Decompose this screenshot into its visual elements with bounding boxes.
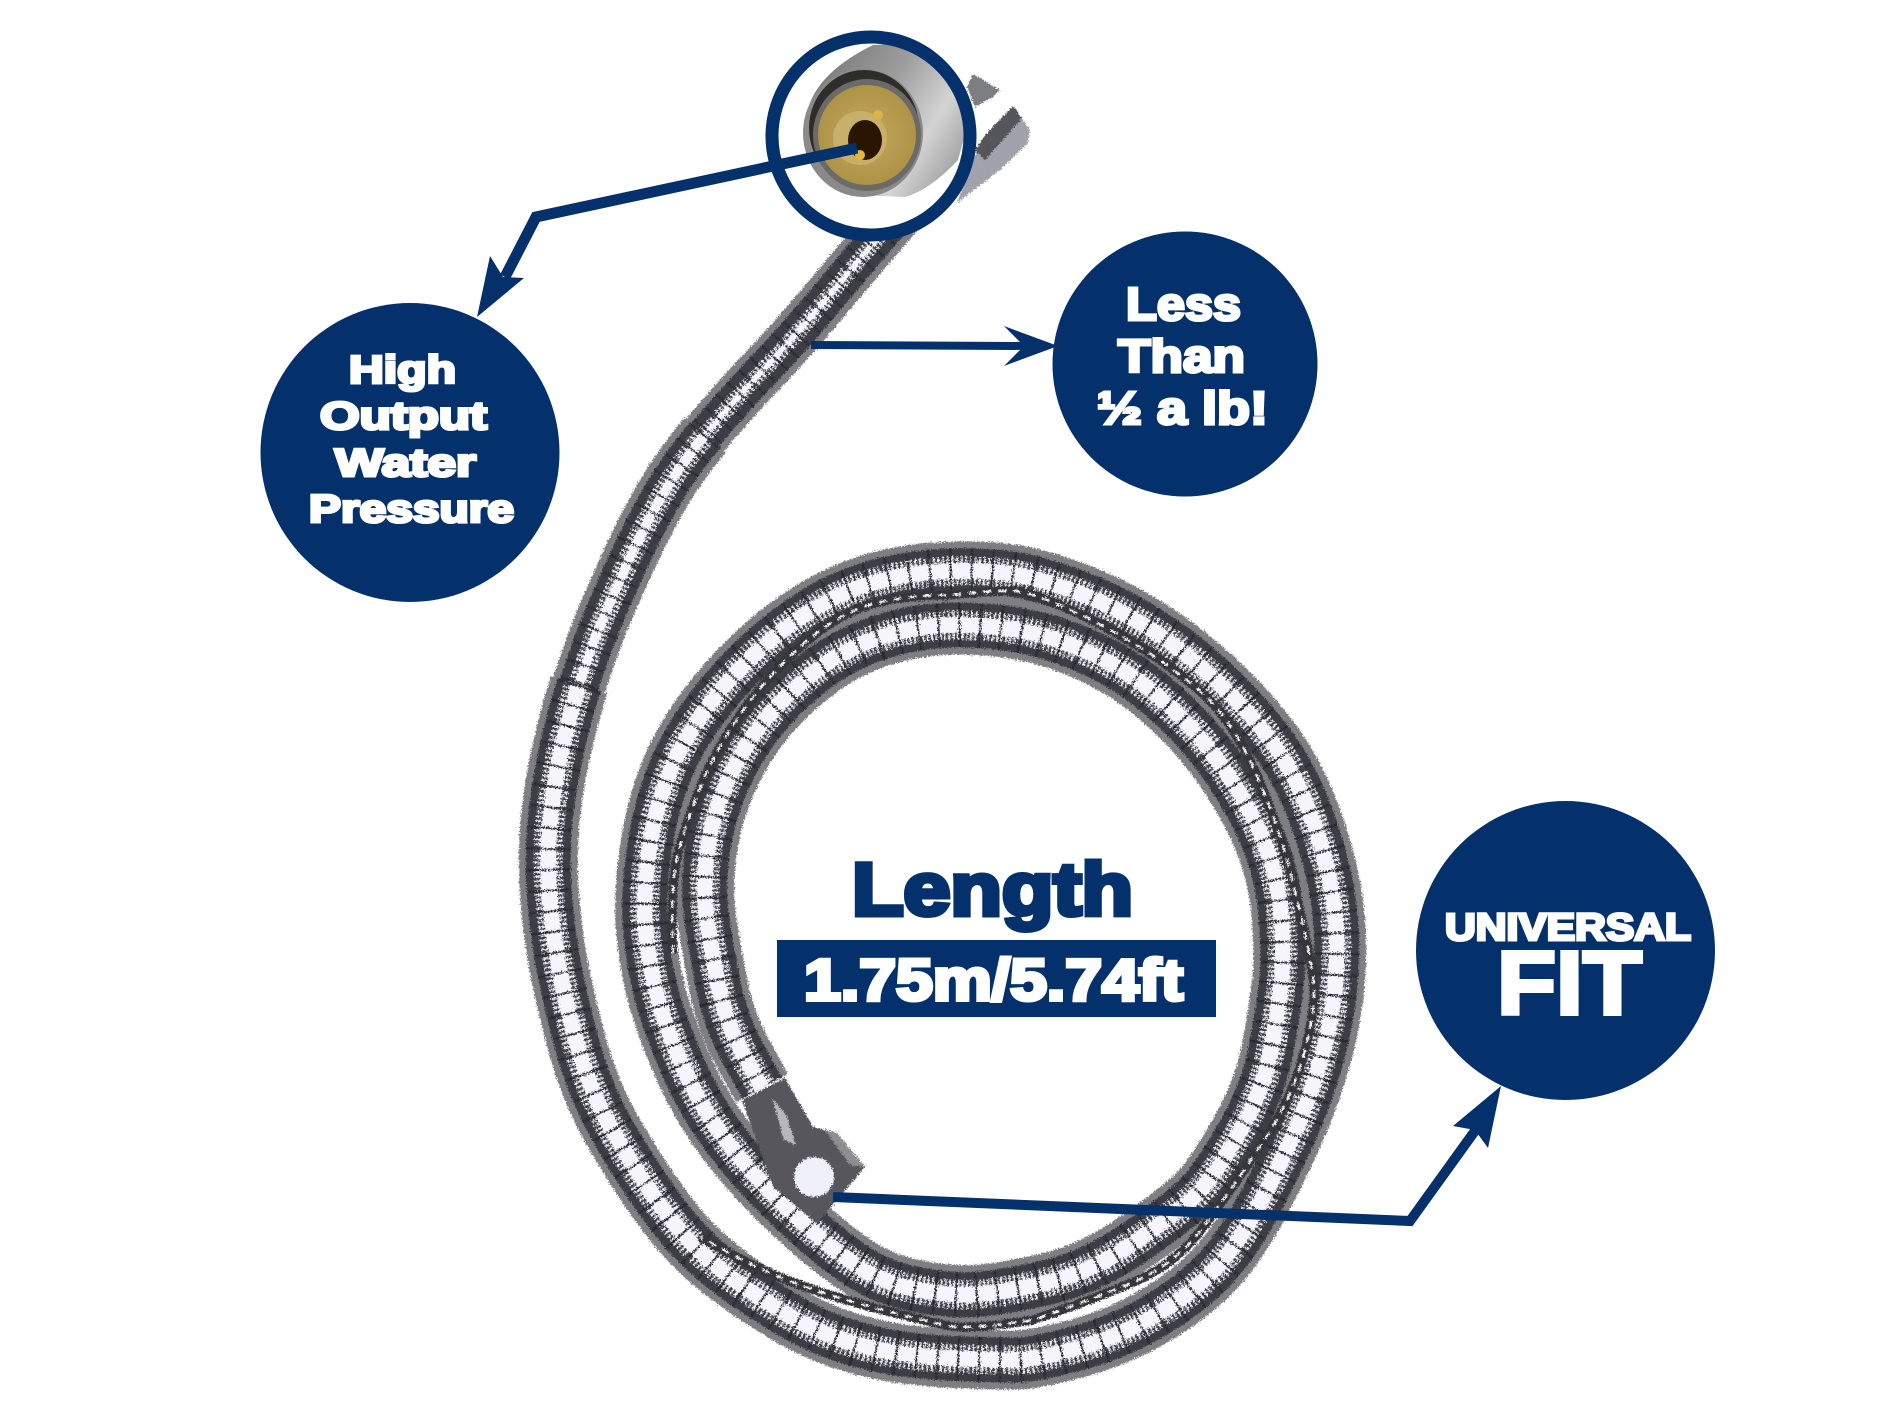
arrow: connector to universal fit callout xyxy=(833,1086,1501,1221)
callout: high output water pressure xyxy=(260,303,560,602)
infographic canvas xyxy=(260,30,1715,1391)
length heading: Length xyxy=(852,848,1133,931)
callout: less than half a pound: Less xyxy=(1126,278,1241,330)
callout: universal fit xyxy=(1416,801,1715,1100)
callout: high output water pressure: Water xyxy=(335,442,476,485)
callout: universal fit: FIT xyxy=(1497,934,1642,1034)
hose end connector xyxy=(742,1078,865,1223)
arrow: hose to weight callout xyxy=(811,326,1058,366)
callout: less than half a pound: ½ a lb! xyxy=(1097,382,1268,434)
callout: high output water pressure: High xyxy=(349,349,456,392)
arrow: fitting to high output callout xyxy=(477,148,857,317)
callout: high output water pressure: Pressure xyxy=(309,488,514,531)
callout: less than half a pound xyxy=(1052,232,1318,496)
length value banner xyxy=(777,940,1216,1017)
length value banner: 1.75m/5.74ft xyxy=(804,948,1183,1013)
hose end fragments behind lens xyxy=(957,74,1030,203)
callout: high output water pressure: Output xyxy=(320,395,487,438)
callout: less than half a pound: Than xyxy=(1118,330,1245,382)
metal shower hose xyxy=(548,195,1337,1360)
magnifier lens: fitting close-up xyxy=(772,37,972,235)
callout: universal fit: UNIVERSAL xyxy=(1445,907,1691,949)
